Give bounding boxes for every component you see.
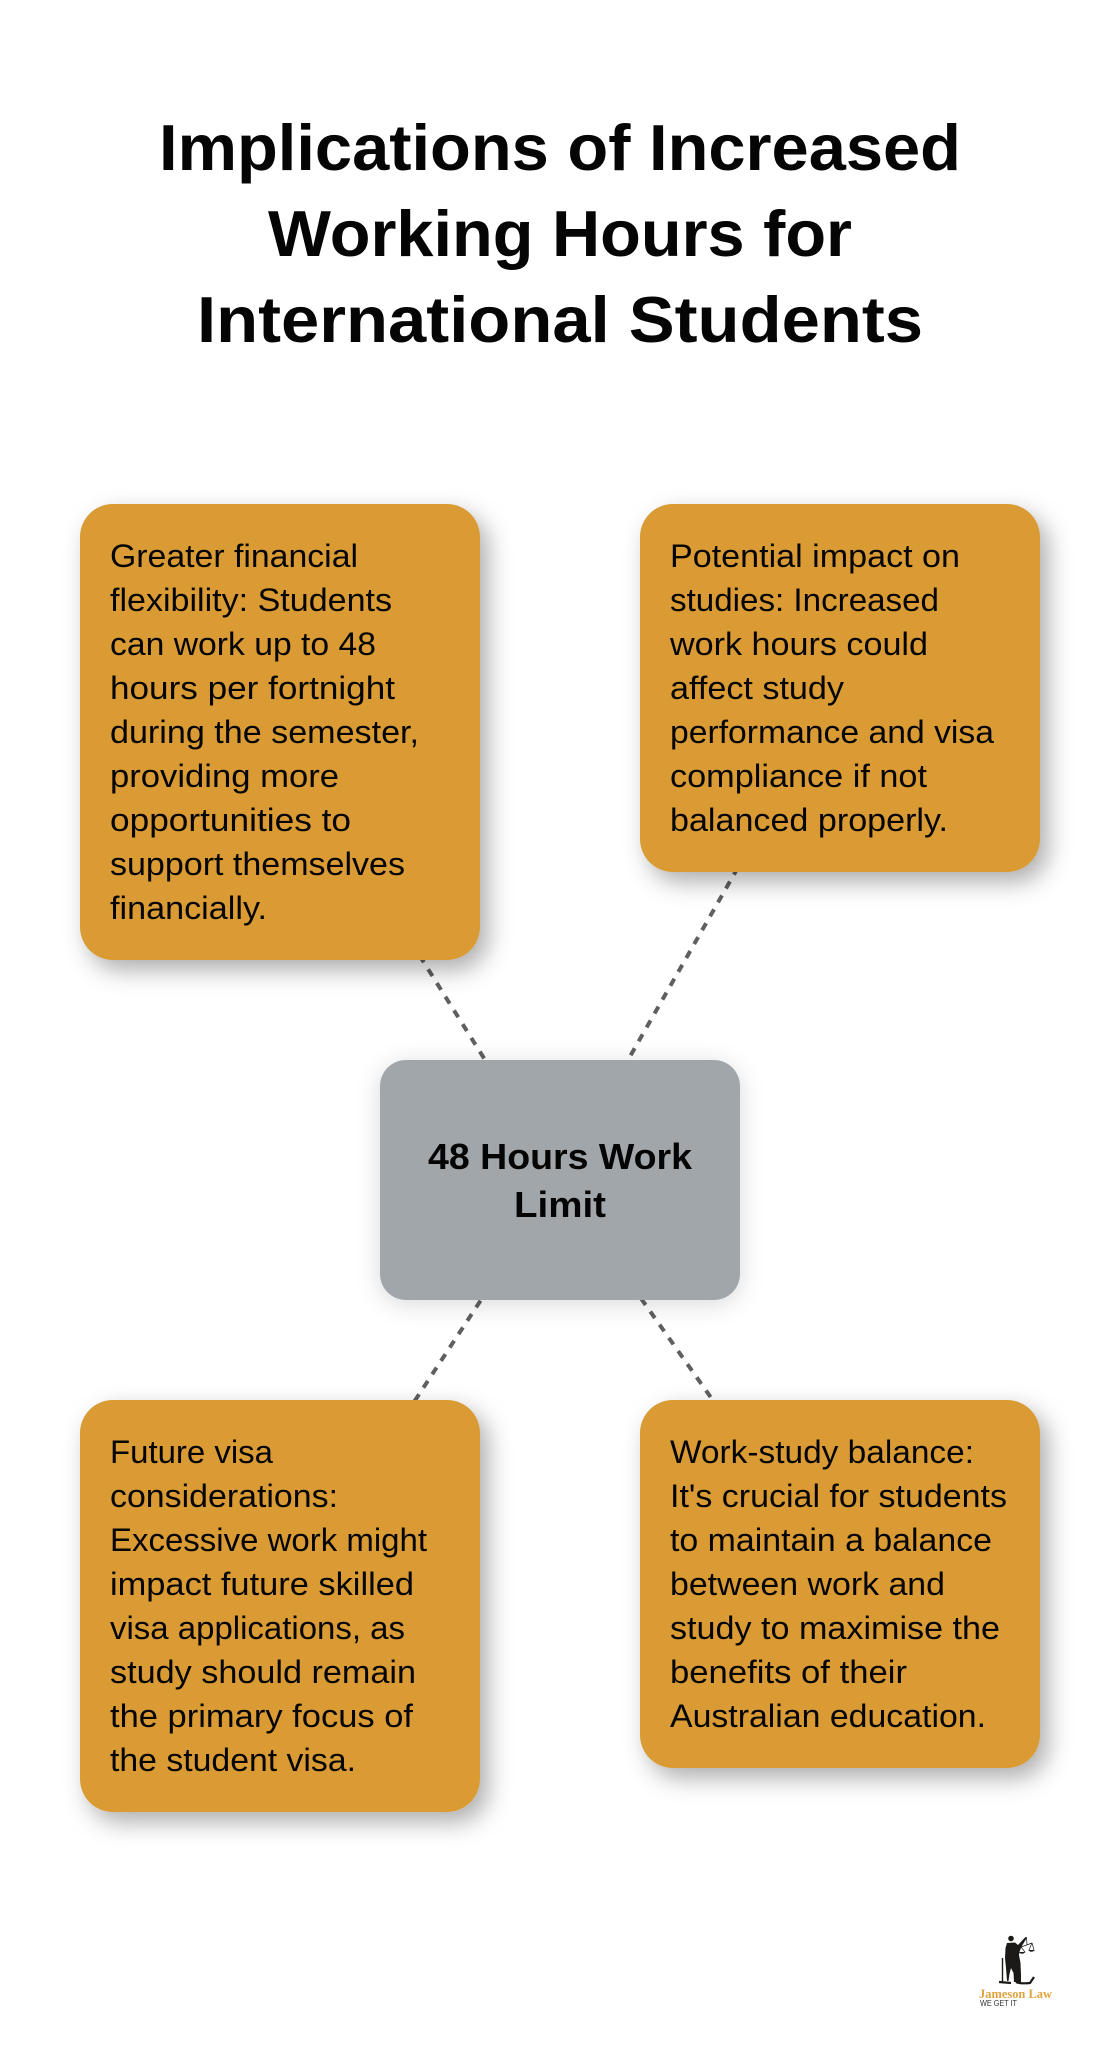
panel: greater financial flexibility: can work up to 48 xyxy=(110,626,376,662)
panel: potential impact on studies: balanced properly. xyxy=(670,802,948,838)
panel: future visa considerations: Excessive work might xyxy=(110,1522,427,1558)
panel: greater financial flexibility xyxy=(80,504,480,960)
connector: centre to impact on studies xyxy=(631,866,739,1055)
panel: potential impact on studies: compliance if not xyxy=(670,758,927,794)
panel: work-study balance xyxy=(640,1400,1040,1768)
panel: greater financial flexibility: providing more xyxy=(110,758,339,794)
panel: potential impact on studies: work hours could xyxy=(669,626,928,662)
panel: future visa considerations: study should remain xyxy=(110,1654,416,1690)
title xyxy=(159,111,961,356)
panel: future visa considerations: the student visa. xyxy=(110,1742,356,1778)
panel: future visa considerations: Future visa xyxy=(110,1434,274,1470)
connector: centre to work-study balance xyxy=(641,1298,712,1399)
panel: potential impact on studies xyxy=(640,504,1040,872)
panel: greater financial flexibility: support themselves xyxy=(110,846,405,882)
panel: greater financial flexibility: financially. xyxy=(110,890,267,926)
panel: potential impact on studies: affect study xyxy=(670,670,845,706)
logo tagline: WE GET IT xyxy=(980,1999,1017,2008)
panel: future visa considerations: visa applications, as xyxy=(110,1610,405,1646)
panel: centre 48 hours work limit xyxy=(380,1060,740,1300)
panel: work-study balance: study to maximise the xyxy=(670,1610,1000,1646)
panel: greater financial flexibility: Greater financial xyxy=(110,538,358,574)
icon: lady justice and L mark xyxy=(999,1936,1035,1983)
panel: future visa considerations: considerations: xyxy=(110,1478,338,1514)
panel: work-study balance: It's crucial for students xyxy=(670,1478,1007,1514)
panel: greater financial flexibility: flexibility: Students xyxy=(110,582,392,618)
title: International Students xyxy=(197,283,923,356)
panel: future visa considerations: impact future skilled xyxy=(110,1566,414,1602)
panel: potential impact on studies: studies: Increased xyxy=(670,582,939,618)
panel: work-study balance: Work-study balance: xyxy=(670,1434,974,1470)
connector: centre to financial flexibility xyxy=(418,953,484,1058)
panel: centre 48 hours work limit: Limit xyxy=(514,1184,606,1225)
panel: potential impact on studies: Potential impact on xyxy=(670,538,960,574)
icon: Jameson Law logo xyxy=(979,1936,1052,2008)
panel: future visa considerations: the primary focus of xyxy=(110,1698,414,1734)
title: Implications of Increased xyxy=(159,111,961,184)
panel: greater financial flexibility: hours per fortnight xyxy=(110,670,395,706)
panel: greater financial flexibility: opportunities to xyxy=(110,802,351,838)
panel: work-study balance: between work and xyxy=(670,1566,945,1602)
title: Working Hours for xyxy=(268,197,852,270)
panel: potential impact on studies: performance and visa xyxy=(670,714,995,750)
panel: work-study balance: benefits of their xyxy=(670,1654,907,1690)
connector: centre to future visa xyxy=(414,1301,480,1402)
panel: future visa considerations xyxy=(80,1400,480,1812)
panel: work-study balance: to maintain a balance xyxy=(670,1522,992,1558)
panel: greater financial flexibility: during the semester, xyxy=(110,714,419,750)
logo wordmark: Jameson Law xyxy=(979,1987,1052,2001)
panel: centre 48 hours work limit: 48 Hours Work xyxy=(428,1136,693,1177)
panel: work-study balance: Australian education. xyxy=(670,1698,986,1734)
